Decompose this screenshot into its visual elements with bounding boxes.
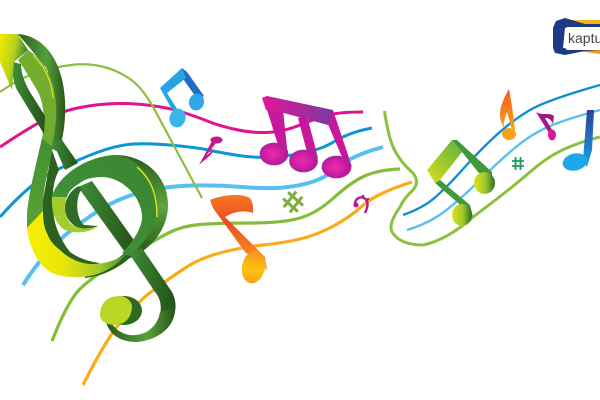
orange note head: [502, 128, 516, 140]
right green hash: [512, 157, 524, 170]
blue note left head: [167, 107, 188, 129]
green staff line: [52, 169, 400, 341]
green front beam: [427, 140, 462, 183]
triple note stems: [264, 100, 352, 167]
magenta flag and stem: [536, 112, 554, 133]
right orange note: [500, 89, 516, 140]
small pink note: [199, 136, 222, 165]
clef lower tail diagonal: [128, 248, 176, 315]
staff lines right: [384, 85, 600, 245]
orange staff line: [83, 182, 412, 385]
clef inner spiral lime: [52, 197, 98, 232]
clef tail ball dark: [106, 296, 142, 325]
bass clef: [354, 195, 369, 213]
clef lower circle dark edge: [113, 155, 168, 258]
blue staff line: [0, 128, 372, 217]
clef lower diagonal: [78, 181, 136, 255]
right green double note: [427, 140, 495, 226]
magenta head: [548, 130, 556, 140]
clef top highlight: [33, 55, 53, 98]
light blue right line: [407, 110, 600, 230]
light blue staff line: [23, 147, 383, 285]
clef dark band behind bowl: [42, 150, 100, 266]
green side beam: [452, 140, 492, 182]
pink triple note: [260, 96, 352, 178]
logo white panel: [565, 27, 600, 50]
blue note beam and stem: [160, 68, 186, 113]
logo yellow and orange wings: [568, 20, 600, 27]
blue note right head: [187, 92, 206, 112]
triple note beam: [262, 96, 333, 125]
clef top cap: [0, 34, 28, 90]
clef lower circle highlight: [137, 167, 157, 217]
orange note stem and flag: [500, 89, 515, 130]
staff lines left: [0, 64, 412, 385]
green heads: [474, 172, 495, 194]
blue head: [561, 151, 589, 173]
green lower stem: [435, 180, 473, 217]
blue right line: [403, 85, 600, 215]
clef tail: [106, 308, 175, 342]
blue stem: [583, 110, 594, 167]
clef lower circle front: [52, 155, 157, 256]
clef upper diagonal: [52, 140, 78, 170]
orange note head: [239, 248, 268, 286]
clef tail ball lime: [100, 296, 132, 325]
clef inner spiral dark: [65, 186, 98, 228]
green S line: [384, 111, 600, 245]
orange note flag and stem: [210, 195, 267, 270]
orange note: [210, 195, 268, 286]
top green sweep line: [0, 64, 202, 198]
triple note heads: [260, 143, 351, 178]
logo: [553, 18, 600, 55]
blue double note: [160, 68, 206, 129]
treble clef: [0, 34, 176, 342]
blue note dark side: [181, 68, 204, 100]
green hash: [283, 192, 303, 212]
pink staff line: [0, 103, 363, 147]
logo navy frame: [553, 18, 600, 55]
clef inner loop ribbon: [13, 62, 45, 134]
clef bowl underside: [85, 250, 134, 278]
clef top loop front: [18, 50, 56, 146]
clef big bowl: [27, 211, 128, 277]
right blue note: [561, 110, 594, 173]
clef top loop dark edge: [18, 34, 65, 152]
clef stem: [27, 138, 53, 228]
right magenta note: [536, 112, 556, 140]
